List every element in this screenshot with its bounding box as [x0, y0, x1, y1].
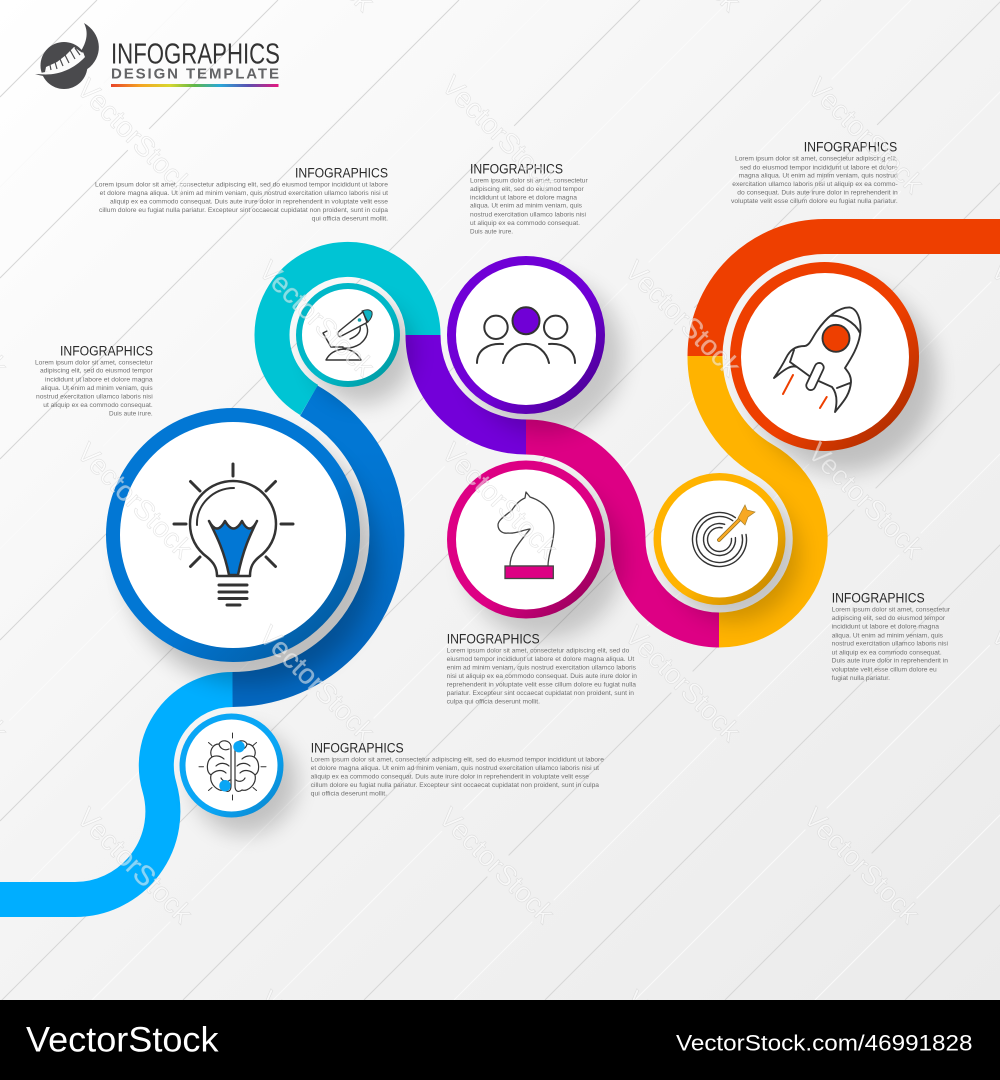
text block: top middle: aliqua. Ut enim ad minim veniam, quis	[470, 203, 583, 210]
text block: right: nostrud exercitation ullamco laboris nisi	[832, 641, 949, 648]
text block: top left: cillum dolore eu fugiat nulla pariatur. Excepteur sint occaecat cupidatat non proident, sunt in culpa	[99, 207, 388, 214]
icon: chess knight	[498, 492, 554, 578]
text block: top right: INFOGRAPHICS	[804, 140, 897, 155]
text block: right: Lorem ipsum dolor sit amet, consectetur	[832, 607, 951, 614]
text block: top middle: INFOGRAPHICS	[470, 161, 563, 176]
ribbon: blue	[232, 401, 387, 690]
text block: right: incididunt ut labore et dolore magna	[832, 624, 939, 631]
text block: left: ut aliquip ex ea commodo consequat.	[43, 402, 153, 409]
watermarks: VectorStock	[619, 255, 747, 383]
text block: left: incididunt ut labore et dolore magna	[45, 376, 153, 383]
footer image id: VectorStock.com/46991828	[676, 1031, 972, 1056]
watermarks: VectorStock	[71, 437, 199, 565]
icon: rocket	[774, 307, 861, 412]
text block: bottom: et dolore magna aliqua. Ut enim ad minim veniam, quis nostrud exercitation ullamco laboris nisi ut	[311, 765, 599, 772]
text block: top left: aliquip ex ea commodo consequat. Duis aute irure dolor in reprehenderit in voluptate velit esse	[110, 199, 388, 206]
text block: top right: exercitation ullamco laboris nisi ut aliquip ex ea commo-	[732, 181, 898, 188]
text block: left: Duis aute irure.	[109, 411, 153, 418]
text block: top left: INFOGRAPHICS	[295, 166, 388, 180]
text block: top middle	[470, 161, 588, 235]
text block: top right: voluptate velit esse cillum dolore eu fugiat nulla pariatur.	[731, 198, 898, 205]
text block: center: Lorem ipsum dolor sit amet, consectetur adipiscing elit, sed do	[447, 648, 630, 655]
text block: top right: Lorem ipsum dolor sit amet, consectetur adipiscing elit,	[735, 156, 898, 163]
text block: center: culpa qui officia deserunt mollit.	[447, 699, 540, 706]
icon: light bulb	[174, 464, 293, 605]
step node: brain	[180, 714, 297, 834]
watermarks: VectorStock	[436, 70, 564, 198]
step node: rocket	[730, 262, 937, 472]
text block: top middle: nostrud exercitation ullamco laboris nisi	[470, 211, 587, 218]
text block: left: adipiscing elit, sed do eiusmod tempor	[40, 368, 154, 375]
step node: microscope	[296, 283, 414, 404]
text block: top right: sed do eiusmod tempor incididunt ut labore et dolore	[740, 164, 898, 171]
logo mark	[35, 23, 99, 89]
text block: top middle: Lorem ipsum dolor sit amet, consectetur	[470, 178, 588, 184]
step node: target	[654, 473, 800, 622]
text block: center: enim ad minim veniam, quis nostrud exercitation ullamco laboris	[447, 665, 637, 672]
ribbon: red	[705, 236, 1000, 356]
icon: target with arrow	[688, 505, 755, 571]
text block: top right	[731, 140, 898, 205]
icon: microscope	[323, 310, 372, 360]
icon: brain	[199, 733, 266, 800]
text block: center: reprehenderit in voluptate velit esse cillum dolore eu fugiat nulla	[447, 682, 636, 689]
icon: three people	[477, 307, 575, 363]
ribbon: light blue	[0, 689, 232, 900]
text block: top left: et dolore magna aliqua. Ut enim ad minim veniam, quis nostrud exercitation ullamco laboris nisi ut	[100, 190, 388, 197]
text block: top middle: Duis aute irure.	[470, 228, 513, 235]
text block: bottom: qui officia deserunt mollit.	[311, 791, 387, 798]
text block: left	[35, 344, 154, 418]
text block: center	[447, 631, 637, 706]
watermarks: VectorStock	[619, 620, 747, 748]
text block: top middle: ut aliquip ex ea commodo consequat.	[470, 220, 580, 227]
step node: team	[447, 256, 623, 434]
text block: bottom: cillum dolore eu fugiat nulla pariatur. Excepteur sint occaecat cupidatat non proident, sunt in culpa	[311, 782, 599, 789]
text block: left: Lorem ipsum dolor sit amet, consectetur	[35, 359, 153, 366]
watermarks: VectorStock	[253, 620, 381, 748]
text block: right: Duis aute irure dolor in reprehenderit in	[832, 658, 948, 665]
text block: right: voluptate velit esse cillum dolore eu	[832, 666, 937, 673]
watermarks: VectorStock	[433, 802, 561, 930]
text block: left: INFOGRAPHICS	[60, 344, 153, 359]
text block: top left: qui officia deserunt mollit.	[312, 216, 388, 222]
logo title: INFOGRAPHICS	[111, 38, 280, 70]
text block: bottom: Lorem ipsum dolor sit amet, consectetur adipiscing elit, sed do eiusmod tempor incididunt ut labore	[311, 757, 604, 764]
text block: right: INFOGRAPHICS	[832, 591, 925, 606]
ribbon: magenta	[526, 437, 719, 630]
text block: left: aliqua. Ut enim ad minim veniam, quis	[41, 385, 153, 392]
text block: right: fugiat nulla pariatur.	[832, 675, 890, 682]
text block: top right: magna aliqua. Ut enim ad minim veniam, quis nostrud	[739, 173, 898, 180]
text block: center: pariatur. Excepteur sint occaecat cupidatat non proident, sunt in	[447, 690, 634, 697]
watermarks: VectorStock	[253, 255, 381, 383]
text block: right: ut aliquip ex ea commodo consequat.	[832, 649, 942, 656]
watermarks: VectorStock	[802, 437, 930, 565]
text block: center: eiusmod tempor incididunt ut labore et dolore magna aliqua. Ut	[447, 656, 634, 663]
text block: top middle: incididunt ut labore et dolore magna	[470, 194, 577, 202]
logo subtitle: DESIGN TEMPLATE	[111, 65, 279, 82]
rainbow underline	[111, 84, 278, 87]
logo	[35, 23, 280, 89]
ribbon: cyan	[272, 259, 423, 400]
text block: center: nisi ut aliquip ex ea commodo consequat. Duis aute irure dolor in	[447, 673, 637, 680]
ribbon path	[0, 236, 1000, 900]
text block: bottom: aliquip ex ea commodo consequat. Duis aute irure dolor in reprehenderit in voluptate velit esse	[311, 773, 589, 780]
watermarks: VectorStock	[436, 437, 564, 565]
text block: center: INFOGRAPHICS	[447, 631, 540, 646]
text block: left: nostrud exercitation ullamco laboris nisi	[36, 393, 153, 400]
footer bar	[0, 1000, 1000, 1080]
text block: top left	[95, 166, 388, 222]
text block: top middle: adipiscing elit, sed do eiusmod tempor	[470, 186, 585, 193]
text block: right	[832, 591, 951, 682]
watermarks: VectorStock	[798, 802, 926, 930]
watermarks: VectorStock	[71, 802, 199, 930]
step node: light bulb	[106, 408, 377, 685]
text block: bottom: INFOGRAPHICS	[311, 740, 404, 755]
text block: right: aliqua. Ut enim ad minim veniam, quis	[832, 632, 944, 639]
text block: bottom	[311, 740, 604, 798]
ribbon: yellow	[705, 356, 810, 630]
text block: top left: Lorem ipsum dolor sit amet, consectetur adipiscing elit, sed do eiusmod tempor incididunt ut labore	[95, 182, 388, 188]
ribbon: purple	[423, 335, 526, 437]
step node: chess knight	[447, 460, 623, 639]
watermarks: VectorStock	[802, 72, 930, 200]
text block: top right: do consequat. Duis aute irure dolor in reprehenderit in	[737, 190, 898, 197]
footer brand: VectorStock	[26, 1021, 219, 1060]
watermarks: VectorStock	[71, 73, 199, 201]
text block: right: adipiscing elit, sed do eiusmod tempor	[832, 615, 946, 622]
